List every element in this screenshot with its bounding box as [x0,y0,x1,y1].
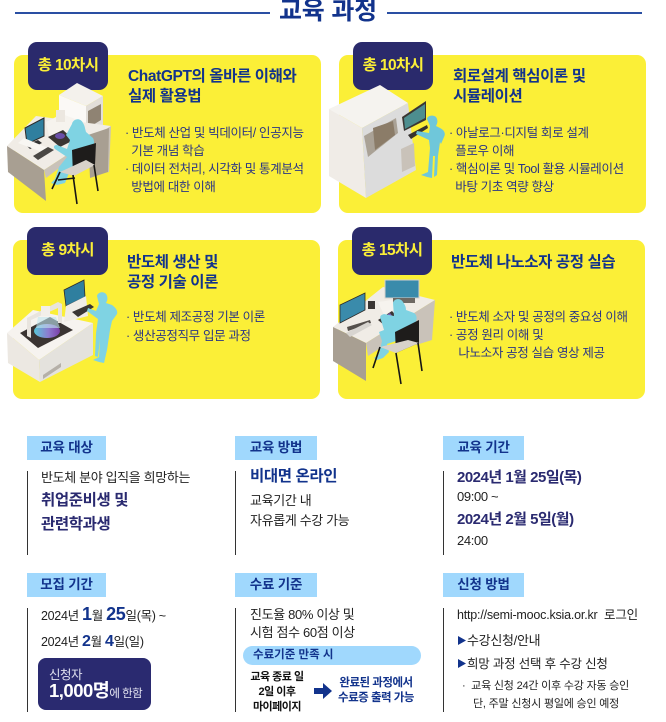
text: course 1 bullets: · 데이터 전처리, 시각화 및 통계분석 [125,162,304,176]
badge: course 4 hours [352,227,432,275]
tag: recruitment: 모집 기간 [40,577,93,592]
text: target [41,470,190,533]
text: method: 교육기간 내 [250,493,311,508]
text: course 3 bullets [126,310,265,343]
text: period: 24:00 [457,533,488,548]
tag: recruitment [27,573,106,597]
text: completion step: 2일 이후 [258,686,296,698]
badge: course 2 hours: 총 10차시 [363,57,423,74]
text: course 3 bullets: · 생산공정직무 입문 과정 [126,329,251,343]
text: course 4 bullets: 나노소자 공정 실습 영상 제공 [458,346,605,360]
text: method: 자유롭게 수강 가능 [250,513,349,528]
text: completion criteria: 진도율 80% 이상 및 [250,607,354,622]
text: course 4 bullets: · 공정 원리 이해 및 [449,328,543,342]
tag: period [443,436,524,460]
badge: course 3 hours [27,227,108,275]
callout: capacity [38,658,151,710]
text: course 2 bullets: 플로우 이해 [455,144,514,158]
text: completion criteria: 시험 점수 60점 이상 [250,625,355,640]
tag: method [235,436,317,460]
text: course 1 bullets [125,126,304,194]
text: certificate [338,676,414,704]
text: course 1 bullets: 방법에 대한 이해 [131,180,216,194]
badge: course 3 hours: 총 9차시 [41,242,94,259]
icon: engineer at wafer machine [7,280,117,382]
text: course 1 bullets: · 반도체 산업 및 빅데이터/ 인공지능 [125,126,304,140]
arrow [314,683,332,699]
tag: period: 교육 기간 [457,440,510,455]
heading: course 2: 시뮬레이션 [453,88,522,105]
panel: course 4 background [338,240,645,399]
text: period: 09:00 ~ [457,489,498,504]
badge: course 4 hours: 총 15차시 [362,242,422,259]
heading: course 2: 회로설계 핵심이론 및 [453,68,586,85]
text: course 4 bullets [449,310,628,360]
icon: engineer at computer desk [333,280,435,384]
tag: method: 교육 방법 [250,440,302,455]
badge: course 2 hours [353,42,433,90]
heading: course 3: 공정 기술 이론 [127,274,218,291]
panel: course 1 background [14,55,321,213]
text: application note [462,680,629,710]
text: course 2 bullets: · 핵심이론 및 Tool 활용 시뮬레이션 [449,162,624,176]
text: target: 반도체 분야 입직을 희망하는 [41,470,190,485]
panel: course 3 background [13,240,320,399]
text: recruitment dates [41,604,166,650]
icon: triangle 1 [458,636,466,645]
heading: course 1 [128,68,296,105]
badge: course 1 hours: 총 10차시 [38,57,98,74]
text: course 1 bullets: 기본 개념 학습 [131,144,204,158]
callout: capacity: 1,000명에 한함 [49,680,142,701]
heading: course 4: 반도체 나노소자 공정 실습 [451,254,615,271]
tag: target [27,436,106,460]
text: step 1: 수강신청/안내 [467,633,540,648]
text: application note: 단, 주말 신청시 평일에 승인 예정 [473,698,619,710]
text: recruitment dates: 2024년 1월 25일(목) ~ [41,604,166,624]
text: completion step: 마이페이지 [253,701,301,713]
tag: target: 교육 대상 [40,440,93,455]
text: target: 관련학과생 [41,516,110,533]
text: course 2 bullets: 바탕 기초 역량 향상 [455,180,554,194]
icon: engineer at microscope desk [7,83,111,204]
text: course 2 bullets [449,126,624,194]
text: application url: http://semi-mooc.ksia.or.kr 로그인 [457,608,638,622]
callout: completion pill: 수료기준 만족 시 [253,649,333,661]
text: recruitment dates: 2024년 2월 4일(일) [41,633,144,650]
text: period: 2024년 2월 5일(월) [457,511,574,528]
heading: course 3: 반도체 생산 및 [127,254,218,271]
heading: course 2 [453,68,586,105]
text: completion step [250,670,304,713]
icon: triangle 2 [458,659,466,668]
heading: course 1: ChatGPT의 올바른 이해와 [128,68,296,85]
tag: completion: 수료 기준 [250,577,302,592]
callout: capacity: 신청자 [49,668,82,682]
text: completion step: 교육 종료 일 [250,671,304,683]
text: completion criteria [250,607,355,640]
text: course 2 bullets: · 아날로그·디지털 회로 설계 [449,126,589,140]
heading: course 3 [127,254,218,291]
callout: completion pill [243,646,421,665]
text: application note: · 교육 신청 24간 이후 수강 자동 승인 [462,680,629,692]
text: course 4 bullets: · 반도체 소자 및 공정의 중요성 이해 [449,310,628,324]
text: method [250,468,350,528]
panel: course 2 background [339,55,646,213]
badge: course 1 hours [28,42,108,90]
icon: engineer at large equipment [329,85,445,198]
text: period [457,469,582,548]
tag: completion [235,573,317,597]
heading: course 1: 실제 활용법 [128,88,201,105]
text: target: 취업준비생 및 [41,492,128,509]
text: certificate: 수료증 출력 가능 [338,692,414,704]
tag: application: 신청 방법 [457,577,510,592]
text: certificate: 완료된 과정에서 [339,677,413,689]
text: method: 비대면 온라인 [250,468,337,485]
tag: application [443,573,524,597]
text: step 2: 희망 과정 선택 후 수강 신청 [467,657,608,671]
text: period: 2024년 1월 25일(목) [457,469,581,486]
text: course 3 bullets: · 반도체 제조공정 기본 이론 [126,310,265,324]
